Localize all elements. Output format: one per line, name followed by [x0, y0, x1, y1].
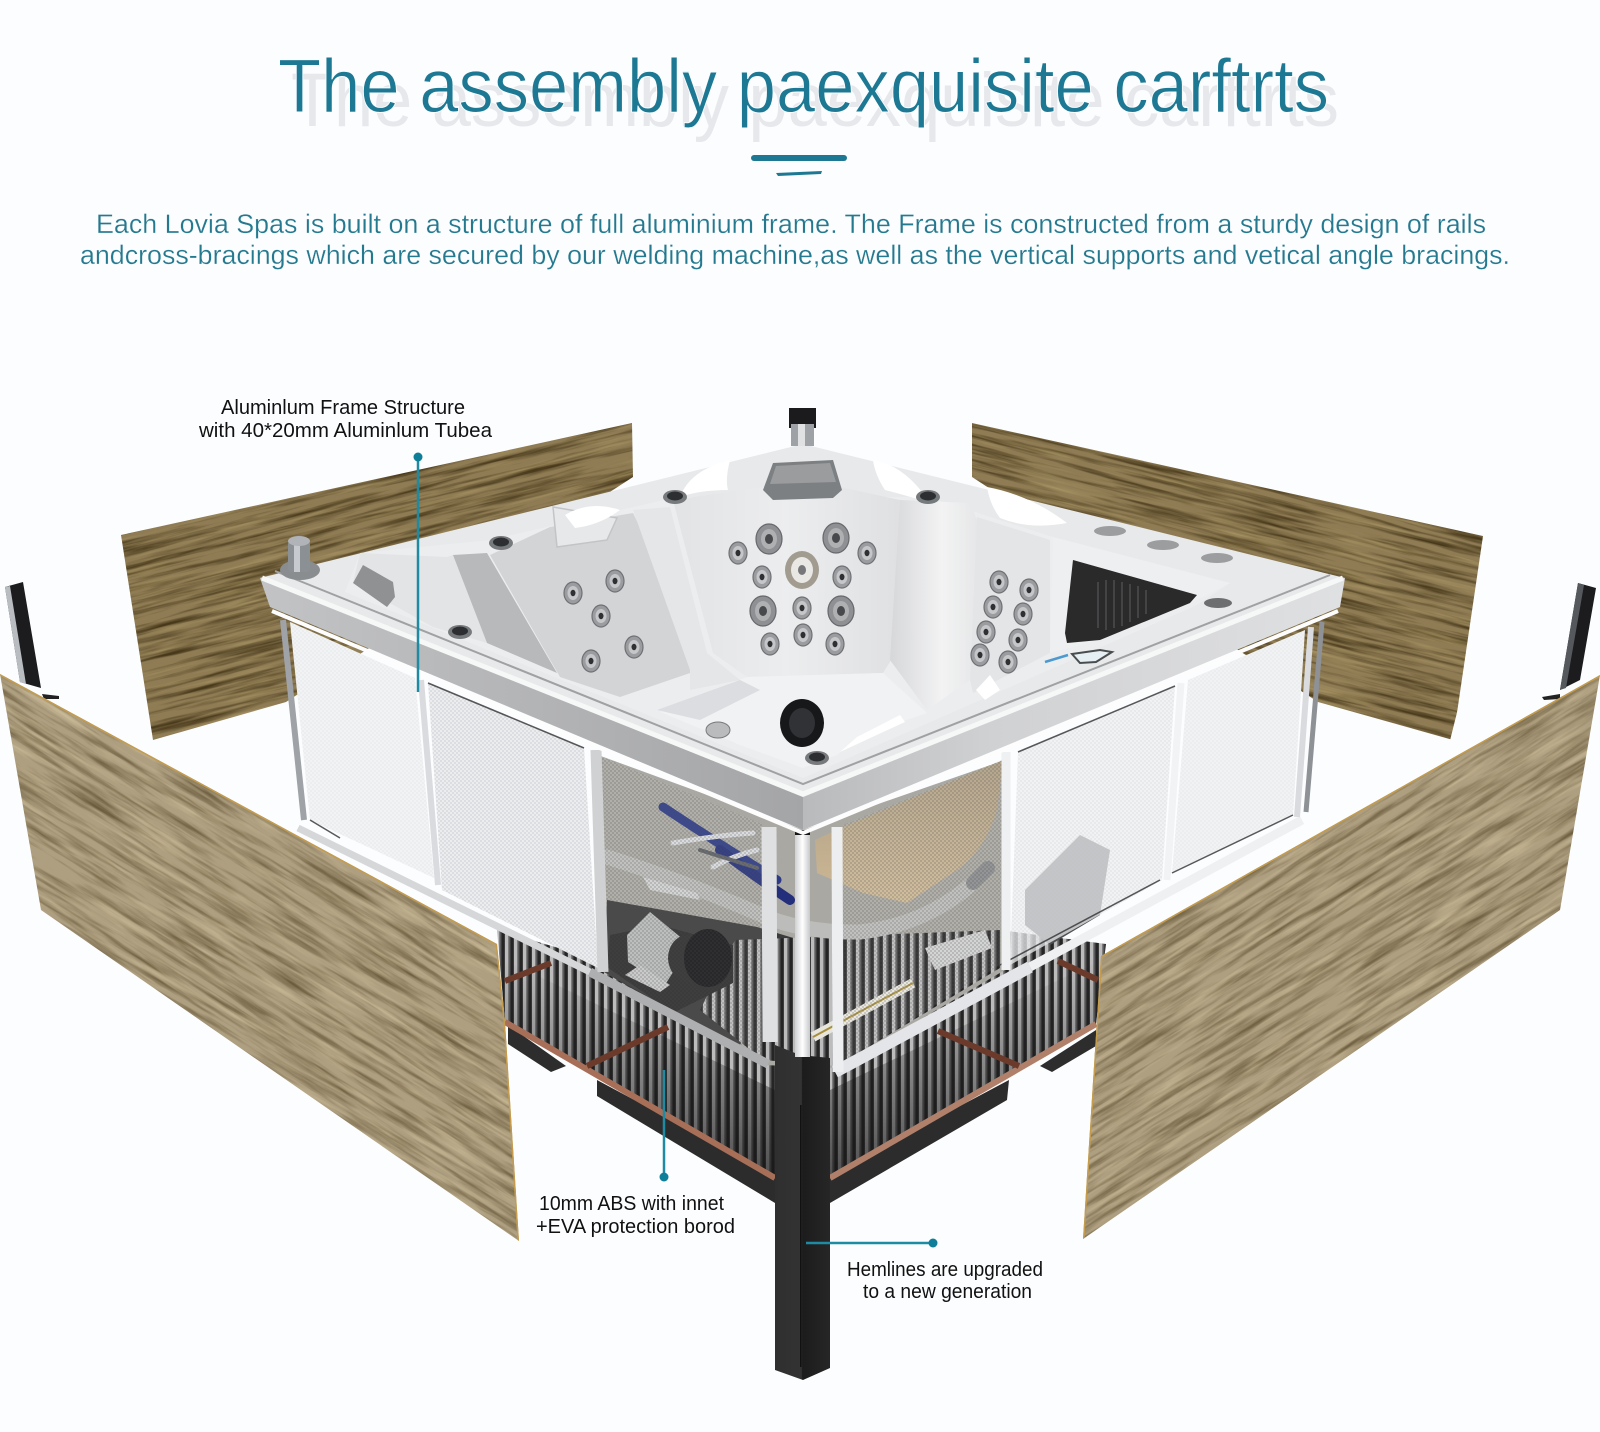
- ribbed board: [497, 930, 1106, 1178]
- back right wood panel: [972, 423, 1483, 740]
- back left wood panel: [121, 423, 633, 740]
- panel 3: [598, 755, 762, 1060]
- leader line: [663, 1070, 665, 1176]
- plumbing lines: [607, 807, 988, 932]
- rim side band left: [260, 578, 803, 830]
- small tray right: [1040, 1030, 1096, 1072]
- leader line: [417, 457, 419, 692]
- frame posts: [283, 620, 1322, 1072]
- title: [278, 44, 1339, 143]
- small tray left: [508, 1025, 566, 1072]
- pillar left: [280, 536, 320, 580]
- label: to a new generation: [863, 1281, 1032, 1303]
- callout: ABS board: [536, 1070, 735, 1238]
- rim deck: [260, 444, 1345, 797]
- right jets: [971, 571, 1038, 673]
- control pack: [1025, 835, 1110, 945]
- title underline: [751, 155, 847, 176]
- black tray left: [597, 1080, 775, 1203]
- label: 10mm ABS with innet: [539, 1193, 724, 1215]
- label: [847, 1259, 1043, 1303]
- drain: [780, 699, 824, 747]
- title shadow: The assembly paexquisite carftrts: [291, 58, 1339, 143]
- intro paragraph: Each Lovia Spas is built on a structure of full aluminium frame. The Frame is constructed from a sturdy design of rails: [96, 209, 1486, 239]
- control display: [1045, 650, 1112, 663]
- frame top white line: [272, 611, 1338, 833]
- leader dot: [414, 452, 422, 462]
- left headrest: [353, 565, 395, 607]
- pump: [607, 877, 733, 1013]
- left footwell: [353, 553, 487, 643]
- beige tub underside: [815, 760, 1003, 903]
- spa tub shell: [260, 408, 1345, 833]
- intro paragraph: [80, 209, 1510, 270]
- leader line: [806, 1242, 932, 1244]
- left dark wall: [453, 553, 557, 673]
- leader dot: [928, 1238, 938, 1248]
- speaker grille: [1065, 560, 1197, 643]
- rim side band right: [803, 578, 1345, 830]
- callout: aluminium frame: [198, 397, 493, 692]
- callout: hemlines: [806, 1238, 1043, 1303]
- left column: [633, 507, 740, 690]
- centre jets: [729, 523, 876, 655]
- panel 5: [1010, 686, 1175, 965]
- aluminium frame: [283, 620, 1322, 1072]
- leader dot: [660, 1172, 668, 1182]
- panel 2: [428, 683, 598, 968]
- left seat wall: [490, 513, 703, 697]
- brass bar: [813, 983, 913, 1037]
- basin: [345, 497, 1230, 778]
- panel 1: [290, 622, 434, 878]
- label: +EVA protection borod: [536, 1216, 735, 1238]
- label: Hemlines are upgraded: [847, 1259, 1043, 1281]
- black tray right: [830, 1080, 1009, 1203]
- right corner post: [1542, 583, 1596, 700]
- centre seat wall: [673, 487, 900, 677]
- interior mechanics: [598, 755, 1110, 1068]
- speaker alcove: [1050, 537, 1230, 653]
- pillar back: [789, 408, 816, 446]
- frame rails: [298, 820, 1302, 1072]
- intro paragraph: andcross-bracings which are secured by our welding machine,as well as the vertical supports and vetical angle bracings.: [80, 240, 1510, 270]
- lip lines: [262, 578, 1343, 794]
- front left step: [657, 680, 760, 720]
- dark equipment zone: [604, 900, 800, 1050]
- front left wood panel: [0, 674, 519, 1241]
- glossy highlights: [565, 460, 1067, 700]
- centre post: [795, 830, 810, 1057]
- back headrest: [763, 460, 842, 500]
- seat pillow: [553, 507, 617, 547]
- deck bolts: [448, 490, 1232, 765]
- mesh frame panels: [290, 622, 1305, 1062]
- support leg: [775, 1045, 830, 1380]
- pale cylinder: [925, 930, 992, 970]
- ribs seen through the frame: [700, 930, 1000, 1066]
- deck covers: [1094, 526, 1233, 563]
- right seat wall: [970, 517, 1050, 693]
- label: with 40*20mm Aluminlum Tubea: [198, 420, 493, 442]
- label: [198, 397, 493, 442]
- copper cross bars: [505, 961, 1098, 1066]
- interior backdrop: [598, 755, 1005, 1068]
- left corner post: [5, 582, 59, 699]
- title text: The assembly paexquisite carftrts: [278, 44, 1329, 129]
- panel 4: [843, 760, 1002, 1062]
- undercarriage trays and ribs: [497, 930, 1106, 1203]
- label: Aluminlum Frame Structure: [221, 397, 465, 419]
- floor: [660, 673, 927, 768]
- copper edge right: [830, 1024, 1096, 1178]
- panel 6: [1172, 630, 1305, 873]
- front right wood panel: [1083, 675, 1600, 1239]
- copper edge left: [505, 1022, 775, 1178]
- left jets: [564, 570, 643, 672]
- label: [536, 1193, 735, 1238]
- right column: [890, 500, 977, 710]
- panel top shadow lines: [310, 683, 1293, 965]
